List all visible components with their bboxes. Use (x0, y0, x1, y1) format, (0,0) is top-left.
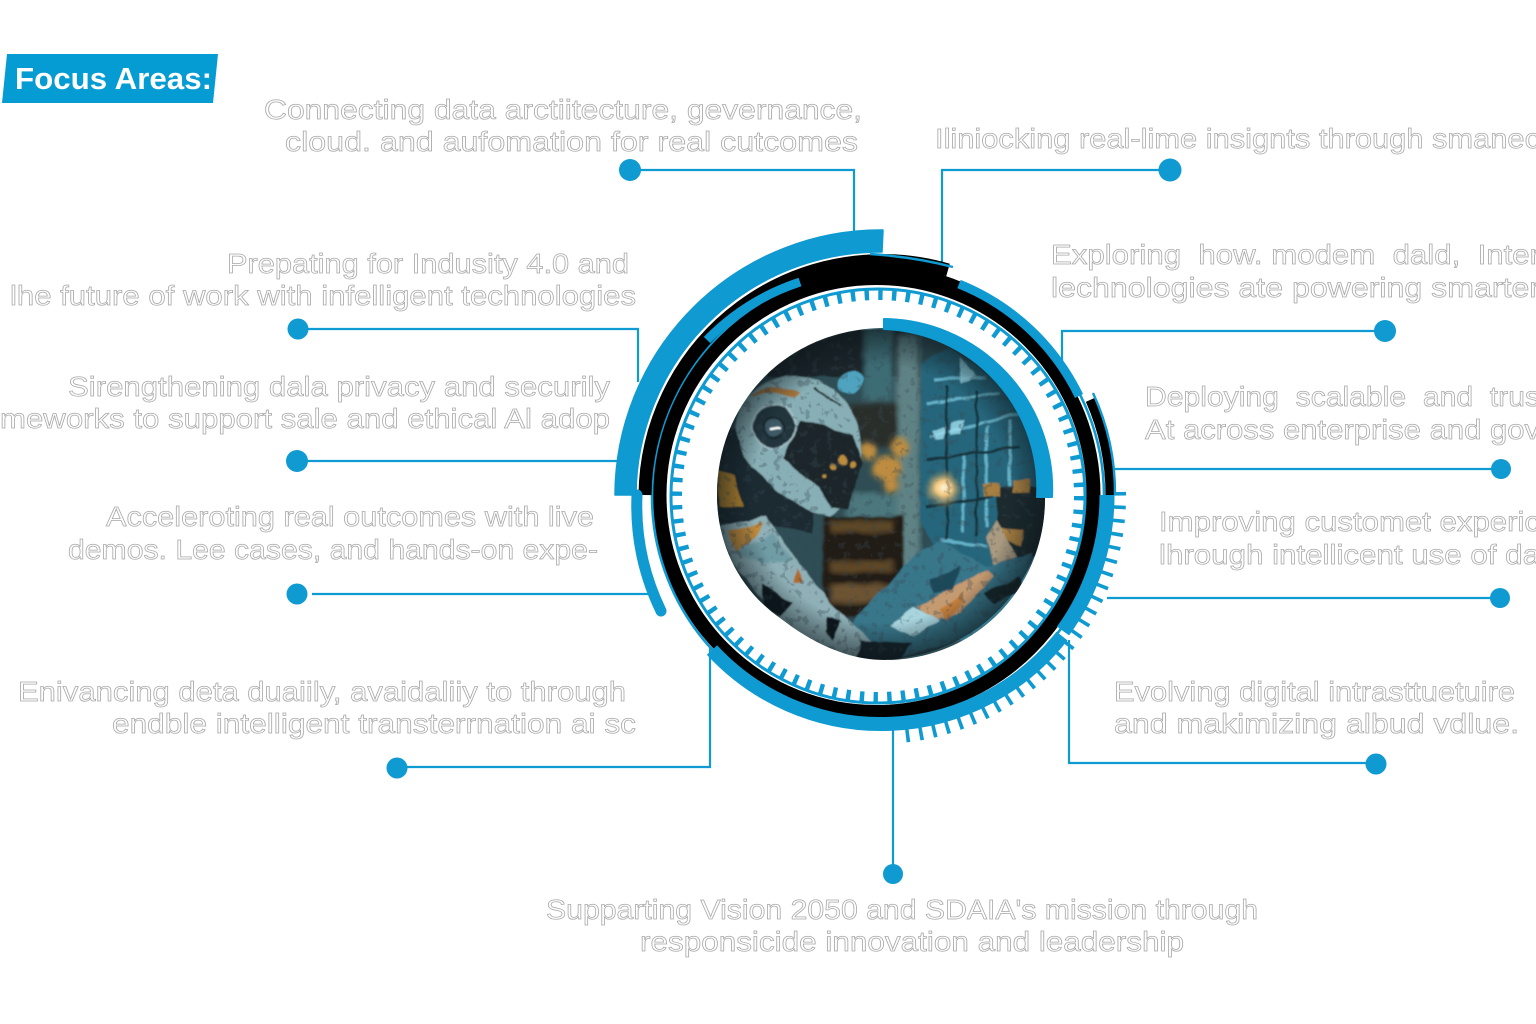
callout: Vision 2050: responsicide innovation and leadership (640, 926, 1184, 957)
callout: digital infrastructure: and makimizing albud vdlue. (1114, 708, 1519, 739)
central dial rings (615, 230, 1119, 736)
callout: real-time insights: Iliniocking real-lime insignts through smanec (935, 123, 1536, 154)
callout: scalable AI: At across enterprise and gov (1145, 414, 1536, 445)
title: Focus Areas (2, 54, 218, 103)
callout: Vision 2050: Supparting Vision 2050 and SDAIA's mission through (546, 894, 1258, 925)
callout: data privacy: Sirengthening dala privacy and securily (68, 371, 610, 402)
right black segment (1090, 400, 1110, 495)
callout: Industry 4.0: Prepating for Indusity 4.0 and (227, 248, 629, 279)
top left thick tapered arc (615, 230, 883, 495)
head (736, 376, 861, 517)
callout: modern data technologies: lechnologies ate powering smarter (1051, 272, 1536, 303)
thin outer ring (652, 270, 1104, 722)
lower left blue arc (637, 495, 661, 611)
bottom blue arc (712, 636, 1062, 724)
callout: live demos: demos. Lee cases, and hands-on expe- (68, 534, 598, 565)
callout: data architecture: Connecting data arctiitecture, gevernance, (264, 94, 862, 125)
upper left inner blue arc (707, 282, 800, 340)
callout: data architecture (264, 94, 862, 232)
building (920, 348, 1036, 568)
callout: scalable AI: Deploying scalable and trus (1145, 381, 1536, 412)
callout: Industry 4.0: lhe future of work with infelligent technologies (10, 280, 636, 311)
callout: customer experience (1107, 506, 1536, 608)
eye (752, 405, 796, 449)
inner blue arc over image (884, 319, 1052, 497)
right hand (847, 540, 1033, 660)
callout: customer experience: lhrough intellicent use of da (1159, 539, 1536, 570)
callout: real-time insights (935, 123, 1536, 262)
callout: modern data technologies (1051, 239, 1536, 365)
callout: digital infrastructure: Evolving digital intrasttuetuire (1114, 676, 1515, 707)
upper right blue arc (959, 284, 1079, 396)
thin inner ring (671, 289, 1085, 703)
outer teeth arc (900, 492, 1119, 736)
top thick black segment (800, 272, 959, 289)
callout: Industry 4.0 (10, 248, 638, 382)
callout: digital infrastructure (1069, 640, 1519, 774)
inward teeth ring (676, 294, 1080, 698)
right thin outer line (1093, 393, 1115, 495)
title: Focus Areas: Focus Areas: (15, 61, 212, 96)
callout: live demos: Acceleroting real outcomes with live (106, 501, 594, 532)
callout: data quality: endble intelligent transterrnation ai sc (112, 708, 636, 739)
main black ring (660, 278, 1094, 712)
callout: data architecture: cloud. and aufomation for real cutcomes (285, 126, 858, 157)
callout: modern data technologies: Exploring how. modem dald, Inter (1051, 239, 1536, 270)
dark neck (713, 427, 813, 533)
edge shading (716, 329, 1046, 659)
callout: data quality (18, 648, 710, 778)
dark speckle texture (719, 328, 1041, 656)
thin top blue line (870, 254, 953, 267)
right thick block (1063, 495, 1107, 631)
callout: scalable AI (1115, 381, 1536, 479)
callout: data quality: Enivancing deta duaiily, avaidaliiy to through (18, 676, 626, 707)
left arm (720, 514, 872, 657)
callout: live demos (68, 501, 652, 604)
callout: data privacy: meworks to support sale and ethical Al adop (0, 403, 610, 434)
callout: data privacy (0, 371, 618, 472)
central robot image (717, 328, 1045, 660)
callout: customer experience: Improving customet experic (1159, 506, 1536, 537)
upper left black arc (645, 261, 948, 495)
callout: Vision 2050 (546, 730, 1258, 957)
